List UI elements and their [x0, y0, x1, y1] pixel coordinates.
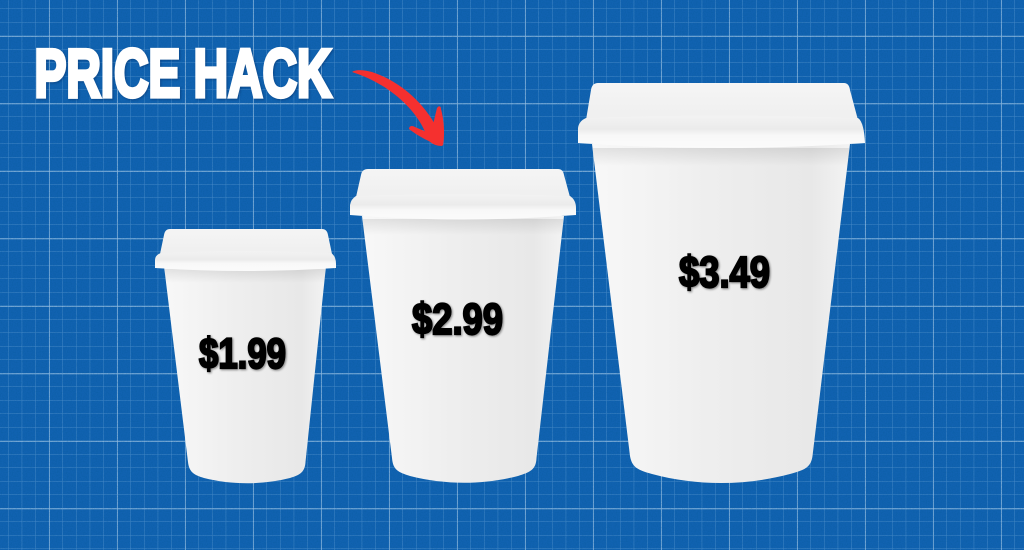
cup: small: [155, 229, 336, 483]
medium cup brim: [350, 194, 576, 220]
cup: large: [578, 83, 865, 483]
small cup body: [164, 266, 326, 483]
cup: medium: [350, 169, 576, 483]
price: medium: $2.99: [412, 295, 503, 344]
large cup brim: [578, 116, 865, 148]
price: large: $3.49: [679, 248, 770, 297]
large cup body: [592, 144, 850, 483]
price: small: $1.99: [199, 330, 286, 378]
large cup lid: [586, 83, 858, 120]
icon: red curved arrow: [352, 70, 444, 146]
small cup lid: [160, 229, 332, 254]
medium cup lid: [356, 169, 570, 197]
title: PRICE HACK: [34, 36, 332, 112]
small cup brim: [155, 251, 336, 271]
medium cup body: [362, 216, 564, 483]
